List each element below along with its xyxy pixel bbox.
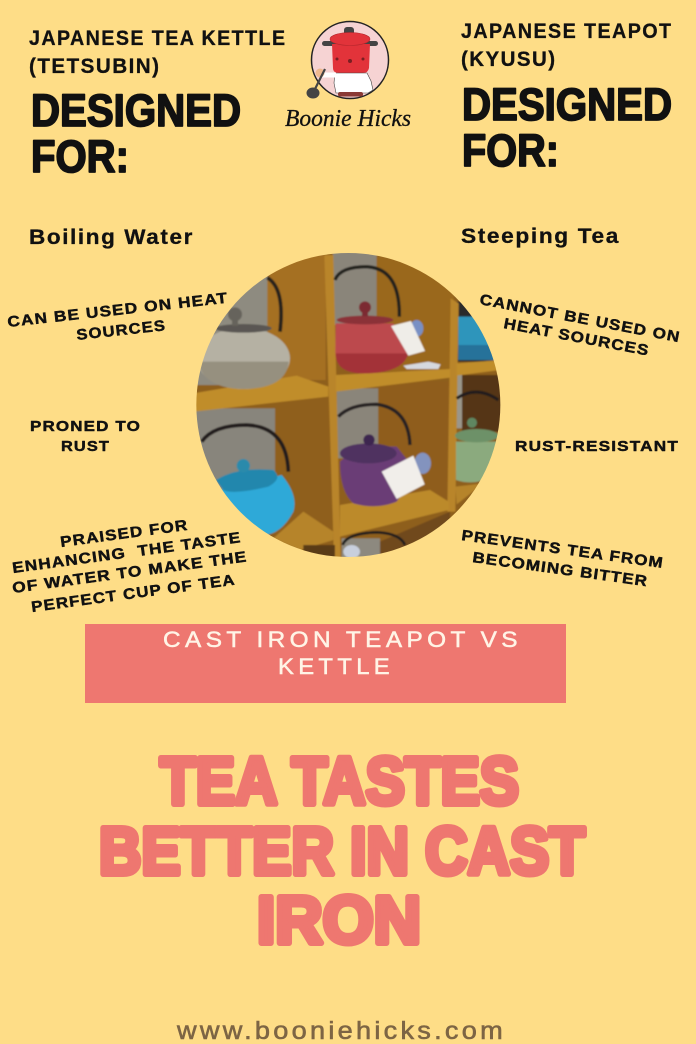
banner: cast iron teapot vs kettle: KETTLE xyxy=(278,654,394,679)
right note: prevents tea from becoming bitter xyxy=(460,527,665,590)
left note: can be used on heat sources: SOURCES xyxy=(76,317,167,344)
left purpose: Boiling Water: Boiling Water xyxy=(29,226,194,249)
left note: praised for enhancing the taste xyxy=(11,517,248,616)
logo: Boonie Hicks chef pot mascot xyxy=(285,22,411,132)
left note: proned to rust xyxy=(30,418,141,455)
right note: cannot be used on heat sources: CANNOT BE USED ON xyxy=(478,291,682,346)
left note: proned to rust: RUST xyxy=(61,438,110,455)
left column heading: Japanese tea kettle: (TETSUBIN) xyxy=(29,55,160,78)
headline: tea tastes better in cast iron: TEA TASTES xyxy=(160,744,519,819)
right note: rust-resistant: RUST-RESISTANT xyxy=(515,438,679,455)
left note: praised for enhancing the taste: PRAISED FOR xyxy=(59,517,189,551)
left note: can be used on heat sources: CAN BE USED ON HEAT xyxy=(7,290,229,331)
headline: tea tastes better in cast iron xyxy=(99,744,585,958)
left column title: Designed for xyxy=(31,85,241,182)
right purpose: Steeping Tea: Steeping Tea xyxy=(461,225,620,248)
logo wordmark: Boonie Hicks xyxy=(285,106,411,132)
right column title: Designed for xyxy=(462,79,672,176)
headline: tea tastes better in cast iron: IRON xyxy=(257,883,421,958)
right note: cannot be used on heat sources xyxy=(478,291,682,360)
left column heading: Japanese tea kettle xyxy=(29,27,286,78)
left note: praised for enhancing the taste: OF WATER TO MAKE THE xyxy=(11,548,248,597)
left note: proned to rust: PRONED TO xyxy=(30,418,141,435)
circular photo of teapots on wooden shelves xyxy=(190,245,510,565)
right column title: Designed for: FOR: xyxy=(462,125,559,176)
right note: prevents tea from becoming bitter: PREVENTS TEA FROM xyxy=(460,527,665,572)
right column heading: Japanese teapot: JAPANESE TEAPOT xyxy=(461,20,672,43)
left column heading: Japanese tea kettle: JAPANESE TEA KETTLE xyxy=(29,27,286,50)
left column title: Designed for: DESIGNED xyxy=(31,85,241,136)
banner: cast iron teapot vs kettle xyxy=(85,624,566,703)
right column heading: Japanese teapot: (KYUSU) xyxy=(461,48,556,71)
left note: praised for enhancing the taste: ENHANCING THE TASTE xyxy=(11,529,242,577)
left note: praised for enhancing the taste: PERFECT CUP OF TEA xyxy=(30,572,237,616)
left note: can be used on heat sources xyxy=(7,290,229,344)
left column title: Designed for: FOR: xyxy=(31,131,129,182)
right column title: Designed for: DESIGNED xyxy=(462,79,672,130)
right column heading: Japanese teapot xyxy=(461,20,672,71)
right note: cannot be used on heat sources: HEAT SOURCES xyxy=(502,315,651,360)
headline: tea tastes better in cast iron: BETTER IN CAST xyxy=(99,814,585,889)
right note: prevents tea from becoming bitter: BECOMING BITTER xyxy=(471,549,649,590)
banner: cast iron teapot vs kettle: CAST IRON TEAPOT VS xyxy=(163,627,522,652)
